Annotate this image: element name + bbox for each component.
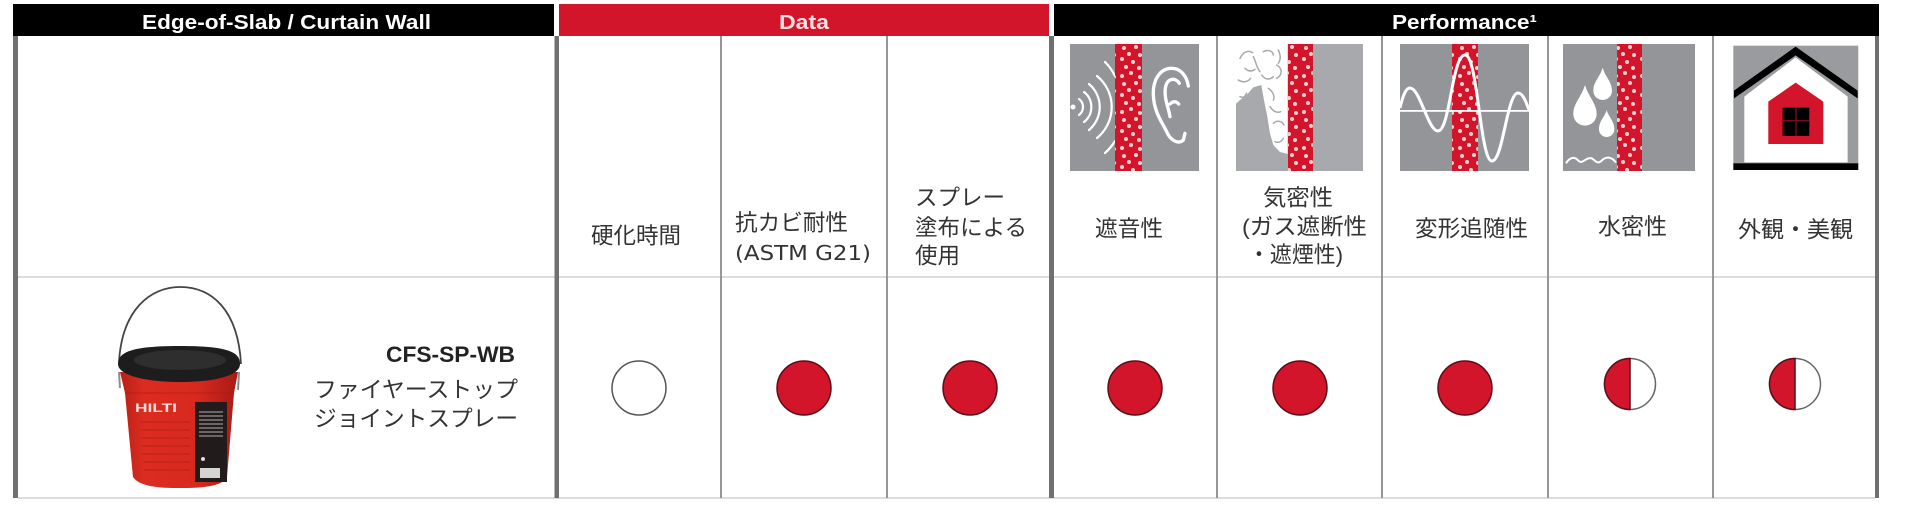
product image: bucket: HILTI: [135, 401, 177, 415]
label: appearance: 外観・美観: [1738, 218, 1853, 242]
rating: spray application full: [943, 361, 997, 415]
header: Data: [559, 4, 1049, 36]
label: airtightness: [1242, 186, 1367, 268]
header: Edge-of-Slab / Curtain Wall: Edge-of-Slab / Curtain Wall: [142, 12, 431, 34]
label: sound insulation: 遮音性: [1095, 216, 1163, 242]
rating: mold resistance full: [777, 361, 831, 415]
product name: ジョイントスプレー: [314, 406, 518, 432]
label: spray application: [915, 186, 1027, 268]
label: movement capability: 変形追随性: [1415, 216, 1528, 242]
label: mold resistance: 抗カビ耐性: [735, 210, 848, 236]
label: spray application: 使用: [915, 244, 960, 268]
label: airtightness: ・遮煙性): [1248, 242, 1343, 268]
header: Performance: Performance¹: [1392, 12, 1537, 34]
label: spray application: スプレー: [915, 186, 1005, 210]
product image: bucket: [118, 287, 241, 488]
rating: appearance half: [1770, 358, 1820, 410]
label: curing time: 硬化時間: [591, 224, 681, 248]
icon: appearance house: [1733, 46, 1858, 170]
label: spray application: 塗布による: [915, 216, 1027, 240]
product name: [314, 342, 519, 432]
rating: movement capability full: [1438, 361, 1492, 415]
label: water tightness: 水密性: [1598, 214, 1667, 240]
label: airtightness: 気密性: [1263, 186, 1333, 210]
label: airtightness: (ガス遮断性: [1242, 214, 1367, 240]
header: Data: Data: [779, 12, 830, 34]
icon: water tightness: [1563, 44, 1695, 171]
product name: ファイヤーストップ: [314, 378, 519, 402]
icon: movement capability: [1400, 44, 1529, 171]
label: mold resistance: [735, 210, 871, 265]
rating: sound insulation full: [1108, 361, 1162, 415]
rating: airtightness full: [1273, 361, 1327, 415]
header: Performance: [1054, 4, 1879, 36]
label: mold resistance: (ASTM G21): [735, 241, 871, 265]
rating: water tightness half: [1604, 358, 1656, 410]
product name: CFS-SP-WB: [386, 342, 515, 367]
header: Edge-of-Slab / Curtain Wall: [13, 4, 554, 36]
icon: airtightness: [1236, 44, 1363, 171]
icon: sound insulation: [1070, 44, 1199, 171]
rating: curing time empty: [612, 361, 666, 415]
